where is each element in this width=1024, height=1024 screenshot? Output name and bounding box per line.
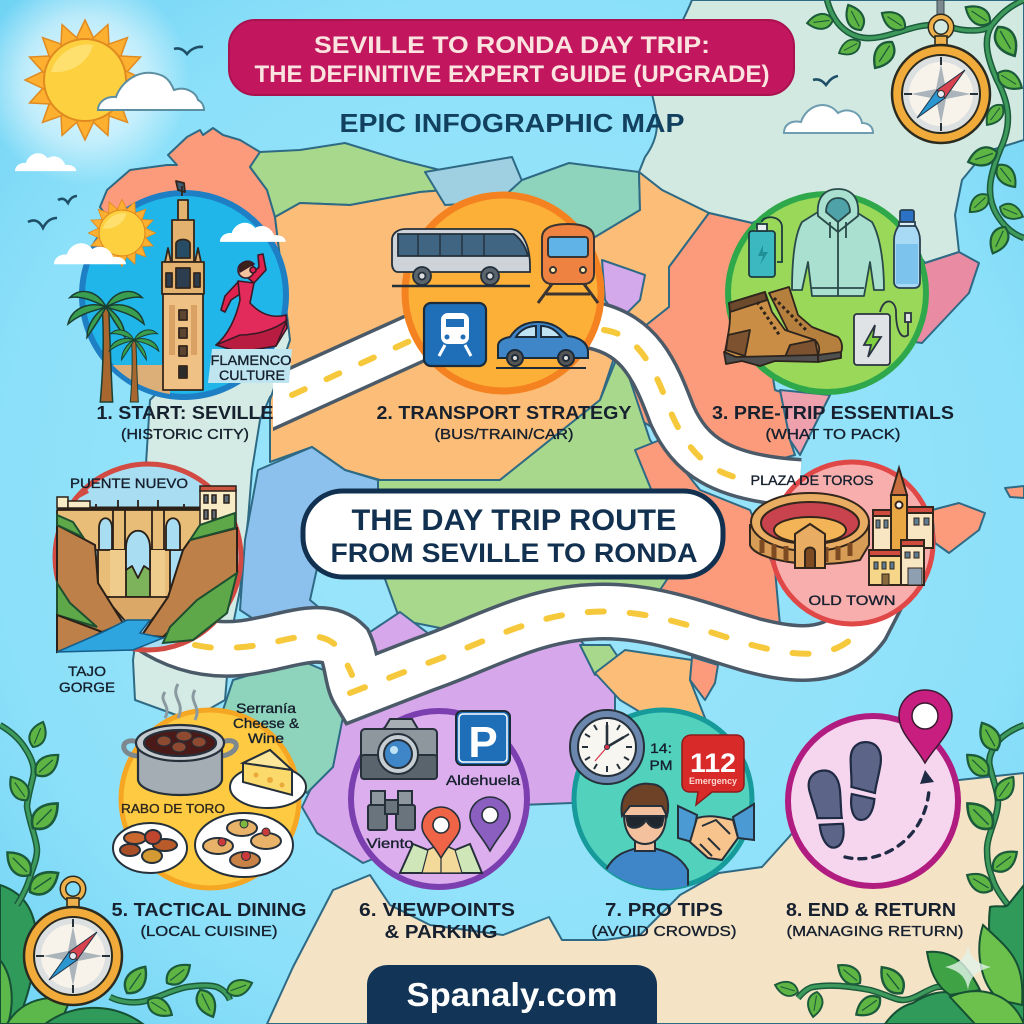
- old town label: OLD TOWN: [808, 592, 896, 608]
- icon: cloud right in circle: [220, 223, 286, 242]
- label: step 1: 1. START: SEVILLE: [96, 403, 274, 423]
- region: south purple: [302, 612, 615, 863]
- icon: small palm tree: [109, 330, 159, 402]
- label: step 1: (HISTORIC CITY): [121, 426, 249, 443]
- panel: route title pill: FROM SEVILLE TO RONDA: [330, 538, 698, 568]
- sun glow: [0, 0, 190, 185]
- icon: man with sunglasses: [606, 784, 688, 890]
- panel: 7 pro tips: [570, 710, 754, 890]
- label: step 2: 2. TRANSPORT STRATEGY: [376, 403, 632, 423]
- region: small salmon: [690, 657, 718, 700]
- region: Andalusia teal: [223, 660, 343, 793]
- region: African coast: [267, 773, 1024, 1024]
- region: Asturias: [250, 143, 445, 217]
- icon: left tapas plate: [113, 823, 187, 873]
- flamenco label: FLAMENCO: [210, 352, 292, 368]
- label: step 3: (WHAT TO PACK): [766, 426, 901, 443]
- icon: destination pin: [899, 690, 952, 763]
- label: step 6: [359, 900, 515, 942]
- icon: sparkle: [945, 945, 991, 990]
- serrania label: [233, 700, 300, 746]
- puente label: PUENTE NUEVO: [70, 475, 188, 491]
- region: Cantabria: [425, 157, 530, 205]
- region: Basque: [500, 163, 640, 240]
- panel: 2 transport: [392, 195, 601, 391]
- region: blue west: [240, 447, 378, 650]
- icon: bottom left rock: [57, 615, 102, 652]
- icon: blue car: [496, 322, 588, 368]
- serrania label: Serranía: [236, 700, 296, 716]
- icon: parking sign: P: [468, 718, 498, 767]
- icon: parking sign: [456, 711, 510, 767]
- icon: bright leaf: [979, 925, 1022, 1005]
- label: step 3: 3. PRE-TRIP ESSENTIALS: [712, 403, 954, 423]
- icon: right cliff: [142, 528, 237, 637]
- panel: route title pill: THE DAY TRIP ROUTE: [352, 504, 676, 537]
- compass top right: [892, 0, 990, 143]
- birds: [28, 47, 838, 228]
- icon: big dark leaf right: [989, 885, 1024, 1024]
- brand footer: [367, 965, 657, 1024]
- icon: river: [57, 620, 163, 652]
- gorge label: GORGE: [59, 679, 115, 695]
- icon: bullring: [750, 493, 869, 568]
- panel: 6 viewpoints and parking: [351, 711, 527, 887]
- rabo de toro label: RABO DE TORO: [121, 801, 225, 816]
- icon: footprint left: [806, 768, 850, 850]
- time label: PM: [650, 757, 672, 773]
- sun top left: [25, 20, 145, 140]
- icon: right cliff lower foliage: [163, 573, 237, 643]
- title banner: THE DEFINITIVE EXPERT GUIDE (UPGRADE): [254, 61, 770, 88]
- icon: right tapas plate: [195, 813, 293, 877]
- icon: red map pin: [422, 807, 460, 858]
- vine bottom right: [773, 719, 1024, 1024]
- icon: camera: [361, 719, 437, 779]
- icon: steam: [163, 684, 197, 720]
- label: step 5: [112, 900, 306, 940]
- icon: large palm tree: [68, 291, 144, 402]
- region: central green: [378, 350, 750, 640]
- icon: water bottle: [894, 210, 920, 288]
- label: step 8: [786, 900, 964, 940]
- icon: emergency bubble: Emergency: [689, 776, 738, 787]
- icon: footprint right: [845, 741, 882, 821]
- label: step 8: (MANAGING RETURN): [786, 923, 964, 940]
- icon: cheese plate: [230, 750, 306, 808]
- label: step 6: & PARKING: [384, 922, 498, 942]
- icon: folded map: [400, 844, 482, 873]
- aldehuela label: Aldehuela: [446, 772, 520, 788]
- icon: binoculars: [368, 791, 415, 830]
- label: step 2: [376, 403, 632, 443]
- road: Seville to transport: [250, 336, 420, 413]
- icon: old town buildings: [869, 468, 933, 585]
- icon: buildings on bridge: [57, 486, 236, 526]
- icon: left cliff: [57, 525, 123, 632]
- region: Portugal: [133, 305, 316, 720]
- icon: battery charger: [854, 301, 911, 365]
- culture label: CULTURE: [219, 367, 285, 383]
- icon: train station sign: [424, 303, 486, 366]
- icon: arrow head: [920, 770, 934, 784]
- serrania label: Cheese &: [233, 715, 300, 731]
- icon: cloud left in circle: [54, 243, 126, 264]
- region: Catalonia: [890, 252, 979, 343]
- road: transport to old town: [592, 325, 800, 483]
- small cloud left: [15, 153, 76, 171]
- label: step 7: [592, 900, 736, 940]
- icon: left cliff lower foliage: [57, 583, 97, 627]
- time label: [650, 740, 672, 773]
- cloud top left: [98, 73, 204, 110]
- region: Balearic main island: [932, 503, 985, 553]
- icon: emergency bubble: 112: [690, 748, 736, 778]
- icon: stew pot: [124, 725, 236, 795]
- region: Galicia: [100, 128, 285, 300]
- icon: purple map pin: [470, 797, 510, 851]
- icon: wall clock: [570, 710, 644, 784]
- panel: plaza de toros and old town: [750, 462, 933, 624]
- road: old town to Puente Nuevo: [150, 590, 880, 693]
- title banner: SEVILLE TO RONDA DAY TRIP:: [314, 32, 710, 59]
- compass bottom left: [24, 879, 122, 1005]
- icon: arrow accent: [75, 491, 88, 498]
- panel: Puente Nuevo and Tajo gorge: [55, 464, 241, 695]
- icon: handshake: [678, 804, 754, 860]
- region: lower salmon: [635, 440, 780, 625]
- icon: hiking boots: [724, 287, 842, 366]
- icon: coach bus: [392, 229, 530, 286]
- icon: small sun: [88, 199, 156, 267]
- label: step 6: 6. VIEWPOINTS: [359, 900, 515, 920]
- ring and sky: [55, 464, 241, 650]
- plaza label: PLAZA DE TOROS: [750, 472, 874, 488]
- region: south green strip: [580, 645, 620, 675]
- brand footer: Spanaly.com: [406, 976, 618, 1013]
- vine top right: [806, 0, 1024, 257]
- label: step 2: (BUS/TRAIN/CAR): [434, 426, 574, 443]
- label: step 3: [712, 403, 954, 443]
- icon: emergency bubble: [682, 735, 744, 805]
- panel: 8 end and return: [788, 690, 958, 886]
- region: Valencia: [620, 213, 795, 470]
- panel: route title pill: [303, 491, 723, 577]
- region: Balearic small island: [1005, 486, 1024, 498]
- region: Castilla: [270, 190, 620, 480]
- vine bottom left: [0, 719, 255, 1024]
- icon: flamenco dancer: [216, 254, 287, 352]
- subtitle: EPIC INFOGRAPHIC MAP: [340, 108, 684, 138]
- title banner: [229, 20, 794, 95]
- icon: ground wall: [112, 365, 170, 394]
- icon: orange train: [538, 224, 598, 303]
- region: south orange: [595, 650, 705, 718]
- label: step 5: 5. TACTICAL DINING: [112, 900, 306, 920]
- text backdrop: [208, 349, 292, 383]
- outlined cloud right: [784, 105, 873, 133]
- icon: right cliff top foliage: [190, 513, 235, 540]
- label: step 7: (AVOID CROWDS): [592, 923, 736, 940]
- region: small pink: [780, 390, 830, 455]
- region: Aragon: [590, 172, 709, 330]
- panel: 3 pre-trip essentials: [724, 189, 926, 392]
- icon: teal power bank: [749, 217, 782, 277]
- label: step 7: 7. PRO TIPS: [605, 900, 723, 920]
- land: France: [639, 0, 1024, 263]
- region: Rioja: [602, 260, 645, 320]
- tajo label: TAJO: [68, 663, 106, 679]
- label: step 1: [96, 403, 274, 443]
- icon: left cliff top foliage: [57, 515, 83, 537]
- icon: hoodie: [792, 189, 884, 296]
- label: step 5: (LOCAL CUISINE): [140, 923, 278, 940]
- icon: bridge: [57, 500, 202, 622]
- time label: 14:: [650, 740, 672, 756]
- icon: big dark leaf bottom: [885, 992, 983, 1024]
- viento label: Viento: [366, 835, 414, 851]
- serrania label: Wine: [248, 730, 284, 746]
- icon: dashed return path: [845, 790, 929, 859]
- icon: medium leaf: [927, 952, 980, 995]
- panel: 5 tactical dining: [113, 684, 306, 888]
- panel: 1 start Seville: [54, 181, 292, 402]
- label: step 8: 8. END & RETURN: [786, 900, 956, 920]
- icon: Giralda tower: [162, 181, 204, 390]
- icon: bright lower leaf: [950, 991, 1024, 1024]
